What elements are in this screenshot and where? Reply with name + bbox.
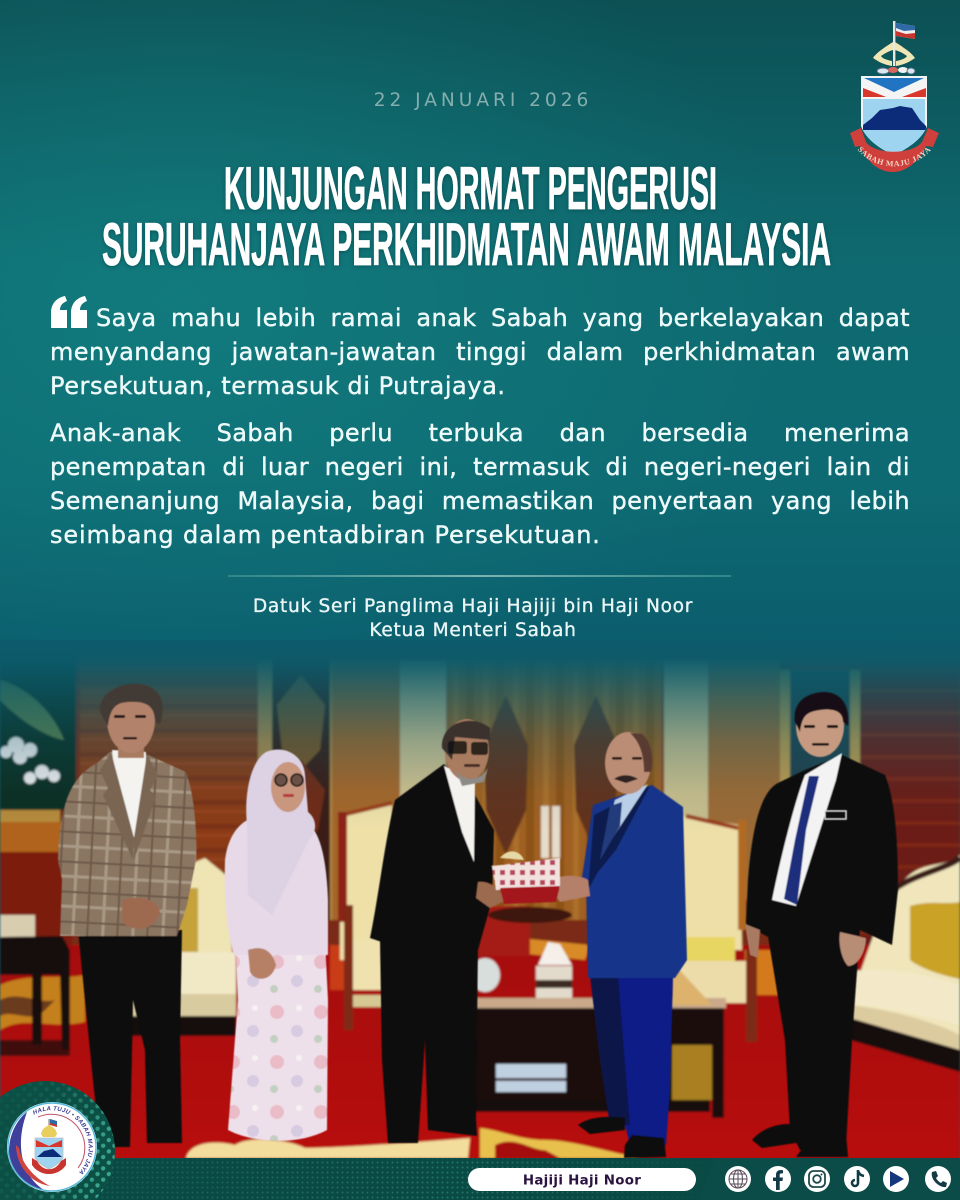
name pill: Hajiji Haji Noor xyxy=(523,1174,641,1188)
first paragraph line 3: Persekutuan, termasuk di Putrajaya. xyxy=(50,372,506,400)
footer bar xyxy=(0,1081,960,1200)
flag and pole xyxy=(893,21,915,66)
attribution divider xyxy=(228,575,731,577)
red carpet xyxy=(0,935,960,1160)
person 4: man in navy blue suit xyxy=(546,732,687,1158)
second paragraph line 3: Semenanjung Malaysia, bagi memastikan penyertaan yang lebih xyxy=(50,487,910,515)
footer band with halftone dots xyxy=(0,1158,960,1200)
first paragraph line 1: Saya mahu lebih ramai anak Sabah yang berkelayakan dapat xyxy=(96,304,910,332)
name pill xyxy=(468,1168,696,1191)
gift box xyxy=(492,851,560,904)
beads xyxy=(877,67,915,74)
first paragraph line 2: menyandang jawatan-jawatan tinggi dalam perkhidmatan awam xyxy=(50,338,910,366)
centre left armchair xyxy=(338,803,392,1030)
second paragraph line 4: seimbang dalam pentadbiran Persekutuan. xyxy=(50,521,601,549)
person 1: man in plaid blazer xyxy=(58,684,196,1147)
attribution name and role xyxy=(253,596,693,641)
circular badge xyxy=(0,1081,115,1200)
centre right armchair xyxy=(676,815,757,1042)
second paragraph line 1: Anak-anak Sabah perlu terbuka dan bersedia menerima xyxy=(50,419,910,447)
title xyxy=(102,155,831,278)
social icon: website globe xyxy=(725,1166,751,1192)
attribution name and role: Datuk Seri Panglima Haji Hajiji bin Haji Noor xyxy=(253,596,693,617)
person 2: woman in lilac baju kurung and hijab xyxy=(225,749,328,1141)
teal fade over the top of the room xyxy=(0,640,960,830)
date: 22 JANUARI 2026 xyxy=(374,90,592,111)
social icon: phone xyxy=(925,1166,951,1192)
person 3: man in black suit with glasses xyxy=(370,719,506,1143)
second paragraph line 2: penempatan di luar negeri ini, termasuk di negeri-negeri lain di xyxy=(50,453,910,481)
motto ribbon xyxy=(850,128,939,172)
orchid painting xyxy=(0,650,76,952)
left sofa xyxy=(126,858,236,1036)
raised arms xyxy=(873,42,915,66)
shield xyxy=(861,76,927,155)
attribution name and role: Ketua Menteri Sabah xyxy=(369,620,577,641)
room wall xyxy=(0,640,960,980)
social icon: instagram xyxy=(804,1166,830,1192)
person 5: man in black suit with blue tie xyxy=(745,692,898,1157)
Sabah coat of arms xyxy=(850,21,939,172)
social icon: facebook xyxy=(765,1166,791,1192)
side table left xyxy=(0,915,70,1056)
small coat of arms in badge xyxy=(32,1119,66,1174)
right sofa xyxy=(850,855,960,1072)
quote text xyxy=(50,304,910,549)
motto ribbon: SABAH MAJU JAYA xyxy=(858,147,931,166)
circular badge: HALA TUJU • SABAH MAJU JAYA xyxy=(33,1106,93,1174)
quote mark icon xyxy=(51,296,87,328)
group photo of the five people in the meeting room xyxy=(0,662,960,1158)
social icon: tiktok xyxy=(844,1166,870,1192)
social icon: youtube play xyxy=(883,1166,909,1192)
coffee table with tissue box xyxy=(470,906,726,1118)
